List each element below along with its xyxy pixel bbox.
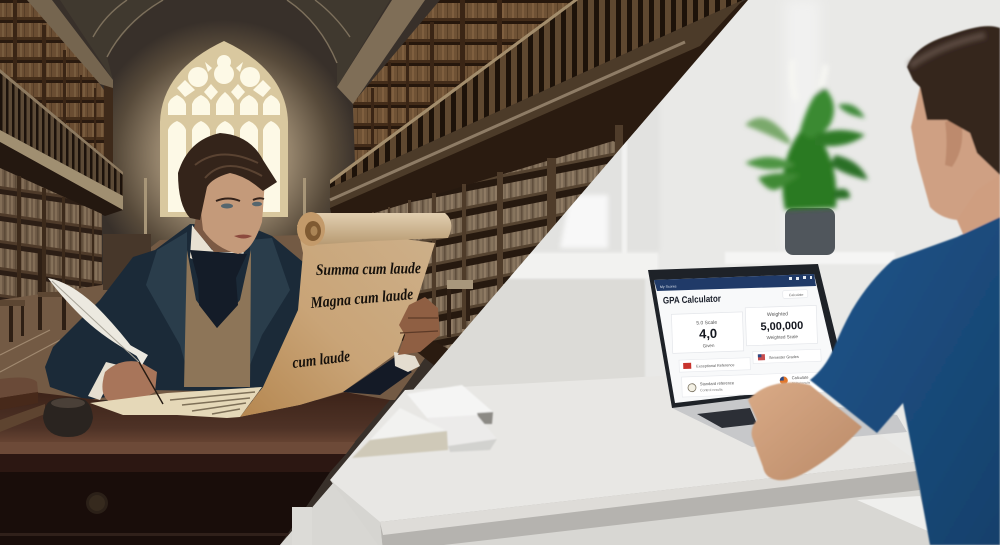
- arched window: [160, 41, 288, 217]
- laptop screen: [654, 274, 840, 403]
- row: summary: [682, 372, 824, 397]
- row: summary: Global results: [792, 381, 811, 385]
- clipped wall background: [270, 0, 1000, 545]
- hair: [907, 26, 1000, 175]
- ceiling vault: [60, 0, 390, 87]
- row: summary: Standard reference: [700, 380, 735, 386]
- card: GPA scale: 5.0 Scale: [696, 320, 717, 327]
- left balcony ledge: [0, 130, 123, 210]
- right lower bookcase: [358, 125, 623, 350]
- row: summary: Control results: [700, 388, 723, 392]
- blue t-shirt: [810, 217, 1000, 545]
- left cornice: [27, 0, 113, 88]
- hair: [178, 133, 277, 220]
- right upper bookcase: [353, 0, 577, 165]
- chair and stool: [0, 250, 67, 342]
- window sill: [510, 253, 658, 279]
- card: weighted scale: 5,00,000: [760, 320, 804, 333]
- heading: GPA Calculator: GPA Calculator: [663, 294, 721, 307]
- waistcoat: [184, 250, 251, 387]
- laptop base: [672, 396, 907, 447]
- text: cum laude: cum laude: [291, 348, 351, 372]
- forearm and hand: [748, 382, 862, 480]
- panel: historic library scene: [0, 0, 760, 545]
- row: US flag: [753, 349, 821, 364]
- card: GPA scale: [671, 312, 744, 353]
- wooden desk: [0, 388, 390, 545]
- potted plant: [745, 60, 868, 255]
- left balcony railing: [0, 70, 123, 196]
- bright window recess: [530, 102, 661, 253]
- row: US flag: Semester Grades: [769, 355, 799, 360]
- white desk: [292, 376, 920, 545]
- card: weighted scale: Weighted Scale: [766, 334, 799, 340]
- laptop screen: My Scores: [660, 284, 677, 289]
- card: GPA scale: 4,0: [699, 326, 717, 341]
- shirt collar and cravat: [190, 225, 246, 270]
- candle stands: [144, 178, 306, 240]
- card: GPA scale: Given: [703, 343, 715, 348]
- stack of papers and book: [352, 385, 497, 458]
- laptop lid: [648, 264, 848, 408]
- hand holding scroll: [343, 297, 440, 395]
- neck and face: [194, 205, 250, 252]
- ink pot: [43, 398, 93, 437]
- ear: [945, 120, 962, 167]
- laptop: [648, 264, 907, 447]
- row: red flag: Exceptional Reference: [696, 363, 734, 369]
- card: weighted scale: [745, 305, 818, 346]
- quill feather: [48, 278, 163, 404]
- floor under desk: [280, 484, 1000, 545]
- right cornice: [337, 0, 425, 104]
- sheet on desk: [90, 387, 262, 418]
- left lower bookcase: [0, 168, 102, 300]
- far reading table: [447, 280, 473, 337]
- frilled cuff: [88, 362, 118, 400]
- right balcony ledge: [330, 0, 743, 208]
- text: Summa cum laude: Summa cum laude: [316, 260, 421, 279]
- writing hand: [102, 361, 157, 403]
- card: weighted scale: Weighted: [767, 311, 788, 318]
- button: [783, 290, 808, 298]
- row: red flag: [679, 358, 750, 372]
- panel: modern study scene: [270, 0, 1000, 545]
- text: Magna cum laude: Magna cum laude: [309, 286, 414, 312]
- under balcony shadow: [330, 0, 760, 370]
- books on desk: [0, 378, 45, 432]
- row: summary: Calculate: [792, 375, 809, 380]
- right balcony railing: [330, 0, 743, 188]
- lower wall: [400, 279, 645, 390]
- library floor: [0, 235, 445, 400]
- coat: [45, 224, 303, 400]
- scroll with honors: [240, 212, 451, 417]
- head: [911, 70, 1000, 220]
- left upper bookcase: [0, 0, 113, 165]
- laptop screen: Calculate: [789, 293, 804, 297]
- neck: [935, 150, 1000, 234]
- man in period coat: [45, 133, 303, 403]
- student: [748, 26, 1000, 545]
